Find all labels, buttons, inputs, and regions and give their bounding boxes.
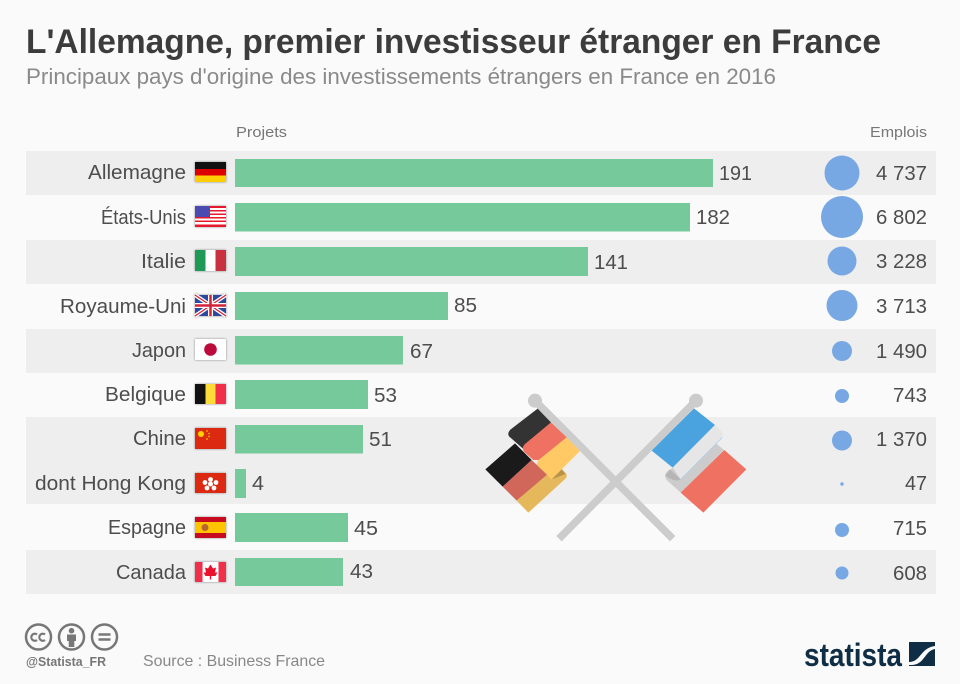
bar	[235, 558, 343, 586]
bar	[235, 469, 246, 498]
project value: 43	[350, 560, 373, 583]
flag: Germany	[195, 162, 226, 182]
jobs value: 6 802	[876, 206, 927, 229]
project value: 53	[374, 384, 397, 407]
subtitle: Principaux pays d'origine des investissements étrangers en France en 2016	[26, 64, 776, 89]
icon: attribution	[59, 624, 84, 650]
jobs value: 3 713	[876, 295, 927, 318]
project value: 67	[410, 340, 433, 363]
project value: 4	[252, 472, 264, 495]
row: États-Unis	[101, 196, 927, 238]
jobs value: 715	[893, 517, 927, 540]
bar	[235, 380, 368, 409]
label: Italie	[141, 250, 186, 273]
illustration: crossed German and French flags	[485, 394, 746, 541]
row: Belgique	[105, 380, 927, 409]
logo: statista	[804, 637, 935, 673]
flag: UK	[195, 295, 226, 316]
jobs value: 47	[905, 472, 927, 495]
label: Espagne	[108, 516, 186, 539]
jobs bubble	[826, 290, 858, 321]
label: Belgique	[105, 383, 186, 406]
row: Canada	[116, 558, 927, 586]
icons: Creative Commons licence	[26, 624, 117, 650]
flag: Canada	[195, 562, 226, 582]
jobs value: 3 228	[876, 250, 927, 273]
jobs bubble	[828, 246, 856, 276]
bar	[235, 247, 588, 276]
logo mark	[909, 642, 935, 666]
jobs bubble	[835, 523, 849, 537]
jobs value: 1 490	[876, 340, 927, 363]
label: Chine	[133, 427, 186, 450]
project value: 51	[369, 428, 392, 451]
row: Allemagne	[88, 156, 927, 190]
project value: 191	[719, 162, 752, 185]
jobs bubble	[836, 566, 848, 580]
jobs bubble	[835, 389, 849, 403]
row: Espagne	[108, 513, 927, 542]
bar	[235, 292, 448, 320]
jobs value: 743	[893, 384, 927, 407]
flag: USA	[195, 206, 226, 227]
bar	[235, 336, 403, 364]
jobs bubble	[832, 341, 852, 361]
handle: @Statista_FR	[26, 655, 106, 669]
label: Allemagne	[88, 161, 186, 184]
column header: Projets: Projets	[236, 125, 287, 141]
bar	[235, 159, 713, 187]
label: États-Unis	[101, 206, 186, 229]
German flag	[485, 409, 580, 513]
flag: Japan	[195, 339, 226, 360]
jobs bubble	[821, 196, 863, 238]
logo wordmark: statista	[804, 637, 902, 673]
project value: 182	[696, 206, 730, 229]
source: Source : Business France	[143, 653, 325, 670]
icon: CC	[26, 624, 51, 650]
jobs bubble	[840, 482, 844, 486]
label: dont Hong Kong	[35, 472, 186, 495]
jobs bubble	[832, 430, 852, 450]
row: Royaume-Uni	[60, 290, 927, 321]
bar	[235, 513, 348, 542]
jobs value: 4 737	[876, 162, 927, 185]
project value: 141	[594, 251, 628, 274]
project value: 85	[454, 294, 477, 317]
flag: Italy	[195, 250, 226, 271]
jobs value: 608	[893, 562, 927, 585]
bar	[235, 425, 363, 454]
jobs bubble	[824, 156, 860, 190]
icon: no derivatives	[92, 624, 117, 650]
label: Japon	[132, 339, 186, 362]
label: Canada	[116, 561, 187, 584]
row: Japon	[132, 336, 927, 364]
row: Italie	[141, 246, 927, 276]
flag: Hong Kong	[195, 473, 226, 493]
row stripes	[26, 151, 936, 594]
flag poles	[528, 394, 703, 541]
project value: 45	[354, 517, 378, 540]
label: Royaume-Uni	[60, 295, 186, 318]
column header: Emplois: Emplois	[870, 125, 927, 141]
row: Chine	[133, 425, 927, 454]
flag: China	[195, 428, 226, 449]
jobs value: 1 370	[876, 428, 927, 451]
row: dont Hong Kong	[35, 469, 927, 498]
French flag	[652, 408, 746, 513]
bar	[235, 203, 690, 232]
flag: Spain	[195, 517, 226, 538]
flag: Belgium	[195, 384, 226, 404]
title: L'Allemagne, premier investisseur étranger en France	[26, 23, 881, 61]
